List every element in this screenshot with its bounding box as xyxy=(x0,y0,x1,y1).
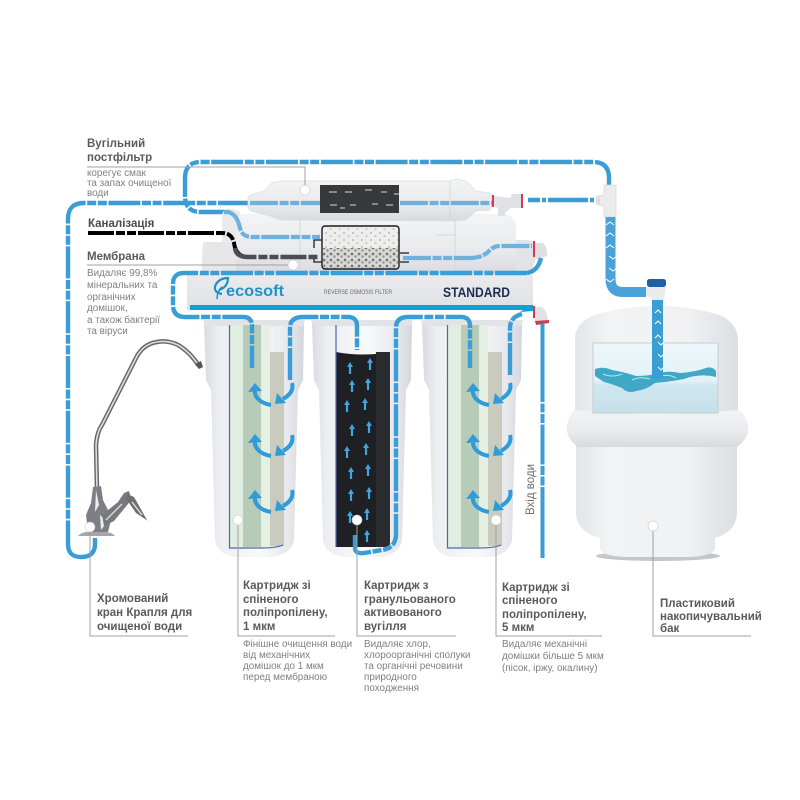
callout: faucet: Хромований xyxy=(97,593,168,605)
callout: tank: Пластиковий xyxy=(660,598,735,610)
drain line xyxy=(88,233,318,257)
callout: cartridge 5 micron: спіненого xyxy=(502,595,558,607)
post-filter and membrane housings xyxy=(201,179,547,276)
callout: membrane: органічних xyxy=(87,292,136,303)
callout: membrane: мінеральних та xyxy=(87,280,158,291)
callout: cartridge 5 micron: (пісок, іржу, окалину) xyxy=(502,663,598,674)
filter head panel: STANDARD xyxy=(443,285,510,300)
callout: cartridge 5 micron xyxy=(491,515,604,674)
callout: cartridge 1 micron xyxy=(233,515,352,683)
ecosoft logo xyxy=(215,278,284,300)
filter head panel xyxy=(187,275,533,310)
callout: carbon cartridge: природного xyxy=(364,672,417,683)
callout: carbon cartridge: вугілля xyxy=(364,621,406,633)
membrane housing xyxy=(222,214,516,274)
callout: tank xyxy=(648,521,762,636)
callout: carbon cartridge: хлороорганічні сполуки xyxy=(364,650,470,661)
callout: cartridge 1 micron: спіненого xyxy=(243,594,299,606)
ecosoft logo: ecosoft xyxy=(226,283,284,300)
tank window xyxy=(593,343,718,413)
callout: carbon cartridge xyxy=(352,515,470,694)
callout: cartridge 5 micron: Видаляє механічні xyxy=(502,639,587,650)
callout: membrane: а також бактерії xyxy=(87,315,160,326)
upper water line: purified water loop from T-fitting to post-filter xyxy=(185,162,609,212)
membrane side fitting xyxy=(534,243,547,259)
faucet handle xyxy=(102,491,131,526)
post-filter carbon cartridge xyxy=(320,185,399,213)
callout: carbon cartridge: активованого xyxy=(364,607,442,619)
callout: cartridge 5 micron: 5 мкм xyxy=(502,622,534,634)
faucet xyxy=(78,341,203,536)
inlet label: Вхід води xyxy=(525,464,537,515)
callout: drain: Каналізація xyxy=(88,218,154,230)
callout: carbon cartridge: гранульованого xyxy=(364,594,456,606)
callout: cartridge 1 micron: від механічних xyxy=(243,650,310,661)
callout: membrane: Видаляє 99,8% xyxy=(87,268,157,279)
callout: carbon cartridge: Видаляє хлор, xyxy=(364,639,431,650)
callout: post-filter: та запах очищеної xyxy=(87,178,172,189)
callout: carbon cartridge: походження xyxy=(364,683,419,694)
callout: cartridge 5 micron: домішки більше 5 мкм xyxy=(502,651,604,662)
callout: post-filter xyxy=(87,138,310,199)
storage pipe to tank xyxy=(606,217,646,292)
filter housing 1 xyxy=(203,320,305,557)
callout: faucet xyxy=(85,522,192,636)
water line: outlet to faucet xyxy=(68,203,250,557)
callout: cartridge 1 micron: домішок до 1 мкм xyxy=(243,661,324,672)
tank body xyxy=(575,306,738,412)
outlet fitting xyxy=(494,194,523,216)
faucet base xyxy=(78,532,115,536)
model name: REVERSE OSMOSIS FILTER xyxy=(324,289,392,296)
filter housing 2 xyxy=(311,320,413,557)
callout: membrane: та віруси xyxy=(87,326,128,337)
T-fitting xyxy=(596,185,616,217)
callout: cartridge 1 micron: Фінішне очищення води xyxy=(243,639,352,650)
pressure tank xyxy=(567,279,748,561)
callout: carbon cartridge: та органічні речовини xyxy=(364,661,463,672)
water lines in membrane and post-filter xyxy=(224,200,596,258)
callout: post-filter: постфільтр xyxy=(87,152,152,164)
filter housing 3 xyxy=(421,320,523,557)
callout: faucet: очищеної води xyxy=(97,621,182,633)
inlet fitting and line xyxy=(533,306,549,558)
callout: cartridge 5 micron: Картридж зі xyxy=(502,582,570,594)
callout: tank: бак xyxy=(660,623,679,635)
callout: membrane xyxy=(87,251,298,337)
callout: membrane: домішок, xyxy=(87,303,128,314)
callout: cartridge 1 micron: перед мембраною xyxy=(243,672,327,683)
callout: post-filter: Вугільний xyxy=(87,138,145,150)
faucet body xyxy=(86,486,111,532)
callout: cartridge 1 micron: Картридж зі xyxy=(243,580,311,592)
fill pipe and cap xyxy=(652,300,663,378)
post-filter housing xyxy=(248,179,494,221)
water splash xyxy=(595,367,716,392)
callout: carbon cartridge: Картридж з xyxy=(364,580,429,592)
membrane cross-section xyxy=(314,226,409,269)
callout: faucet: кран Крапля для xyxy=(97,607,192,619)
water path through head and cartridges xyxy=(173,258,541,553)
callout: post-filter: корегує смак xyxy=(87,168,146,179)
callout: cartridge 1 micron: поліпропілену, xyxy=(243,607,328,619)
callout: membrane: Мембрана xyxy=(87,251,146,263)
callout: cartridge 1 micron: 1 мкм xyxy=(243,621,275,633)
callout: cartridge 5 micron: поліпропілену, xyxy=(502,609,587,621)
callout: post-filter: води xyxy=(87,188,109,199)
callout: tank: накопичувальний xyxy=(660,611,762,623)
